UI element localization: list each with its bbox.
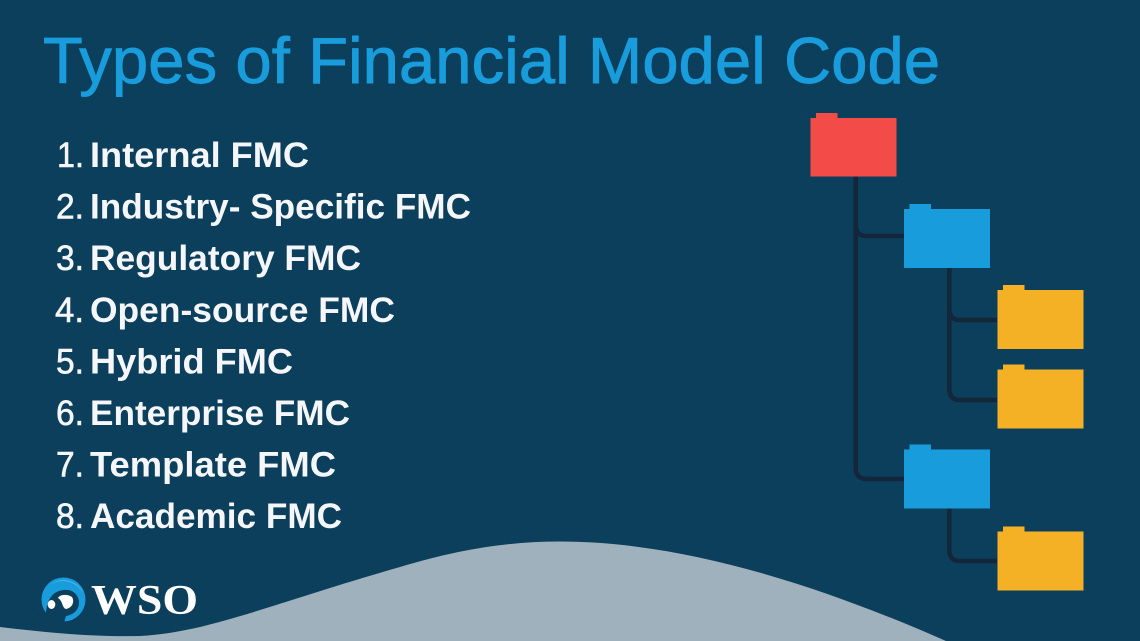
folder: yellow 1 [998,285,1084,349]
item 6: Enterprise FMC [90,394,350,433]
folder tree connectors [856,176,997,561]
item 1: 1. [57,136,84,175]
item 7: Template FMC [90,446,336,485]
folder: blue upper [904,204,990,268]
folder: yellow 3 [998,526,1084,590]
folder: blue lower [904,444,990,508]
item 6: 6. [56,394,84,433]
logo wordmark: WSO [91,578,198,624]
WSO logo [41,578,198,624]
item 5: 5. [56,342,84,381]
list of FMC types [55,136,471,536]
item 2: 2. [56,188,84,227]
item 4: Open-source FMC [90,291,395,330]
folder: red root [810,113,896,176]
item 5: Hybrid FMC [90,342,293,381]
folder: yellow 2 [998,364,1084,428]
item 4: 4. [55,291,84,330]
item 8: 8. [56,497,84,536]
item 3: 3. [56,239,84,278]
icon: logo circle [41,578,86,623]
hill shape at the bottom [0,542,946,641]
item 1: Internal FMC [90,136,309,175]
title: Types of Financial Model Code [43,24,940,97]
item 3: Regulatory FMC [90,239,361,278]
item 7: 7. [56,446,84,485]
item 2: Industry- Specific FMC [90,188,471,227]
item 8: Academic FMC [90,497,342,536]
